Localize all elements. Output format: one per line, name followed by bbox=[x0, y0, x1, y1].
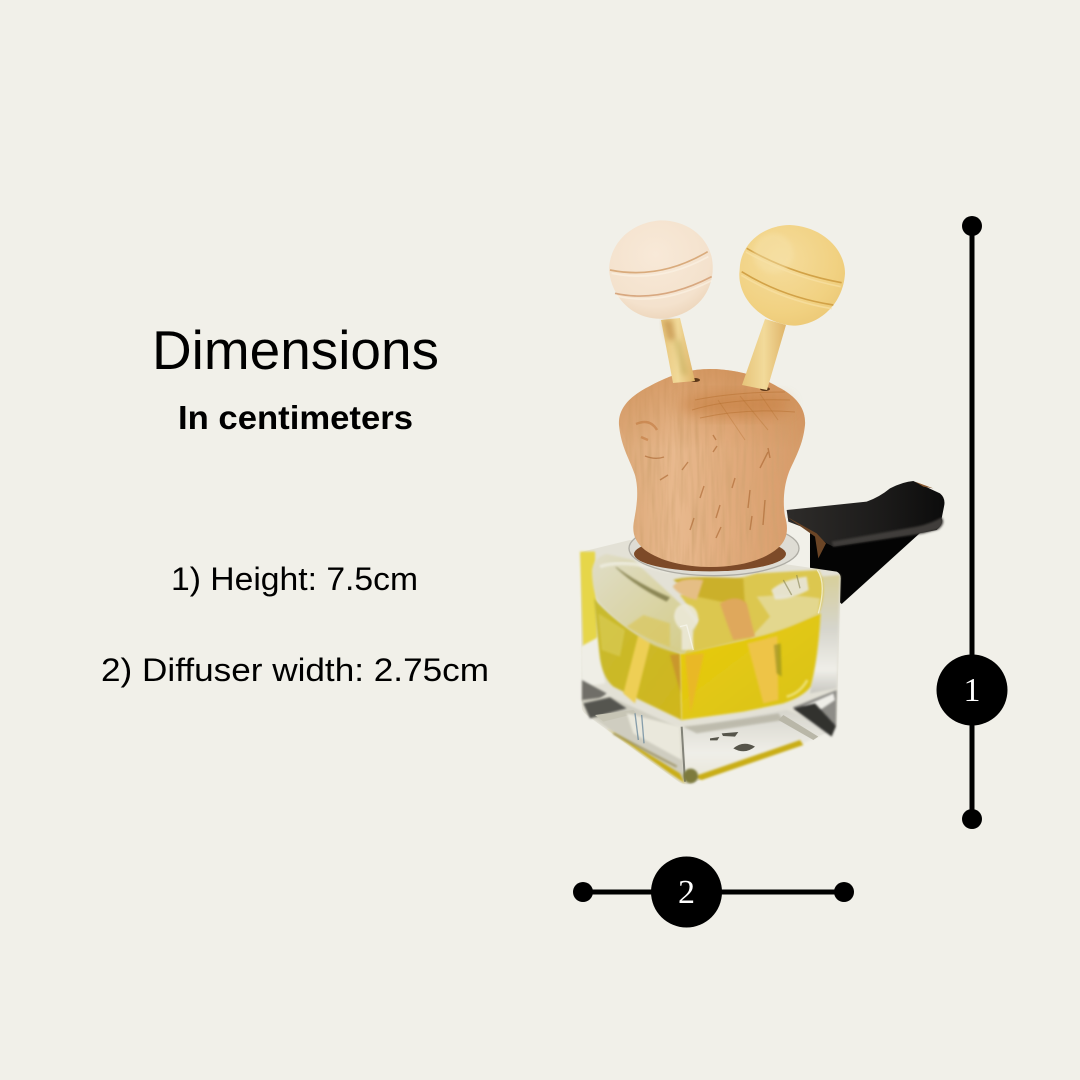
marker number 1: 1 bbox=[964, 672, 980, 709]
glass body bbox=[581, 540, 841, 784]
base left face bbox=[582, 697, 685, 782]
wooden ball: cream bbox=[609, 220, 713, 319]
submerged reeds bbox=[623, 635, 651, 703]
text: diffuser width: 2) Diffuser width: 2.75cm bbox=[101, 652, 489, 688]
left side wall bbox=[580, 552, 597, 653]
product: car diffuser bbox=[580, 220, 944, 784]
width measurement line bbox=[573, 856, 854, 928]
height measurement line bbox=[936, 216, 1008, 829]
base dark reflections bbox=[793, 690, 837, 728]
wooden ball: yellow bbox=[739, 225, 845, 326]
glass bottle bbox=[580, 540, 841, 784]
vent clip bbox=[787, 481, 944, 604]
glass drops bbox=[674, 604, 698, 650]
yellow bottom edge bbox=[693, 740, 803, 780]
subtitle: In centimeters bbox=[178, 399, 413, 436]
metal collar bbox=[629, 521, 799, 576]
reed sticks bbox=[661, 318, 786, 390]
liquid left face bbox=[594, 598, 682, 720]
text: height: 1) Height: 7.5cm bbox=[171, 561, 418, 597]
glass shoulder left bbox=[592, 554, 698, 654]
wooden cap bbox=[619, 369, 805, 567]
glass shoulder right bbox=[680, 570, 823, 654]
liquid right face bbox=[680, 613, 821, 720]
base right face bbox=[683, 710, 837, 782]
right side wall bbox=[810, 575, 840, 693]
marker number 2: 2 bbox=[678, 874, 695, 911]
title: Dimensions bbox=[152, 319, 439, 381]
